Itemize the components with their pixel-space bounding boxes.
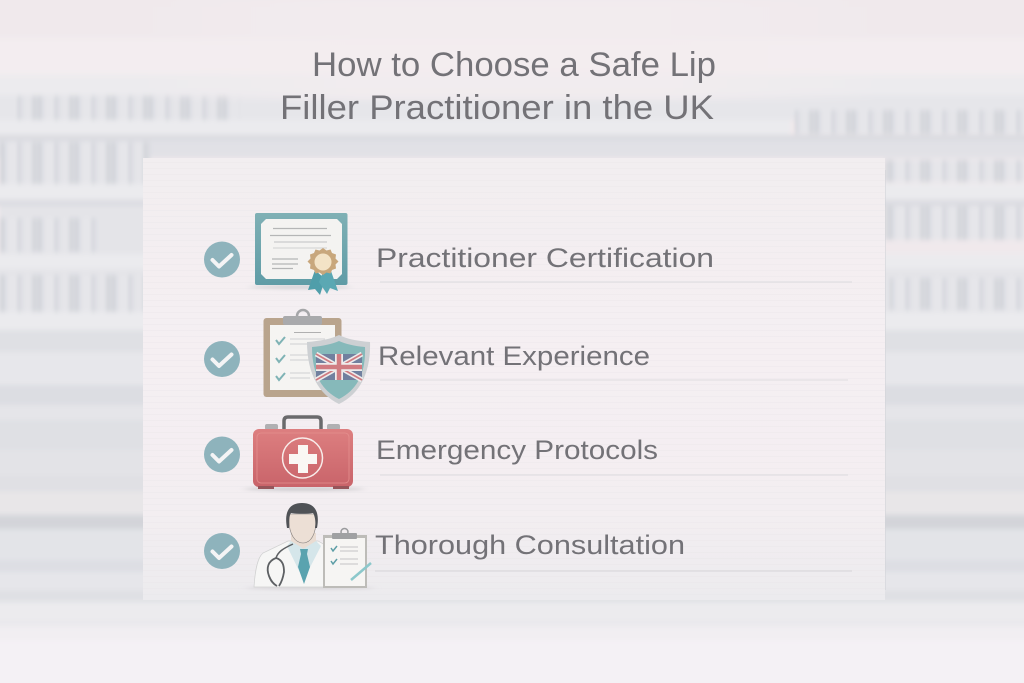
check badge 3 xyxy=(204,436,240,472)
title xyxy=(280,46,716,127)
check badge 2 xyxy=(204,341,240,377)
check badge 4 xyxy=(204,533,240,569)
icon: first aid kit xyxy=(244,417,364,491)
label: Emergency Protocols: Emergency Protocols xyxy=(376,435,658,465)
icon: doctor with clipboard xyxy=(246,503,374,590)
label: Relevant Experience: Relevant Experience xyxy=(378,341,650,371)
label: Practitioner Certification: Practitioner Certification xyxy=(376,243,714,273)
icon: certificate xyxy=(250,213,350,295)
panel: checklist card xyxy=(143,158,886,600)
row 4: thorough consultation xyxy=(204,503,852,590)
icon: clipboard with UK shield xyxy=(264,310,370,404)
check badge 1 xyxy=(204,242,240,278)
row 3: emergency protocols xyxy=(204,417,848,491)
title: Filler Practitioner in the UK xyxy=(280,89,714,127)
title: How to Choose a Safe Lip xyxy=(312,46,716,84)
row 1: practitioner certification xyxy=(204,213,852,295)
label: Thorough Consultation: Thorough Consultation xyxy=(375,530,685,560)
row 2: relevant experience xyxy=(204,310,848,404)
